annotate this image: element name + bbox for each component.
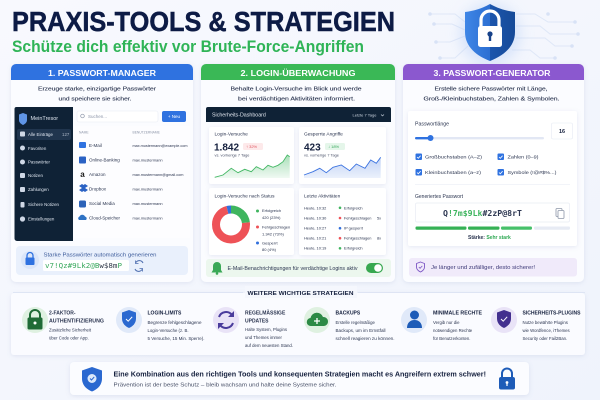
strategy: Backups: Erstelle regelmäßige [336,320,376,325]
password manager sidebar: MeinTresor [30,116,58,122]
dashboard header: Letzte 7 Tage [352,112,377,118]
icon: padlock [499,369,515,390]
auto-generate password callout: Starke Passwörter automatisch generieren [44,252,156,258]
panel: weitere wichtige Strategien [11,286,585,355]
panel heading 1 [11,64,193,80]
strategy: Regelmäßige Updates: und Themes immer [245,335,283,340]
auto-generate password callout: v7!Qz#9Lk2@B w$8mP [45,262,122,270]
panel 2 description: Behalte Login-Versuche im Blick und werde [230,86,362,92]
character option checkboxes: Großbuchstaben (A–Z) [425,155,482,161]
strategy: Login-Limits [116,307,204,341]
password length slider: 16 [559,129,565,135]
recent activity card: Fehlgeschlagen [344,236,371,240]
recent activity card: Heute, 10:30 [304,215,327,220]
section heading: WEITERE WICHTIGE STRATEGIEN [248,291,354,297]
panel: Passwort-Generator [403,64,584,282]
password entry table: max.mustermann [132,186,163,192]
panel 3 description [424,86,560,102]
recent activity card [299,188,386,255]
strategy: 2-Faktor: über Code oder App. [49,336,89,340]
panel 1 description [38,86,156,102]
password strength meter: Stärke: Sehr stark [468,235,511,241]
panel 3 description: Erstelle sichere Passwörter mit Länge, [434,86,548,92]
panel 3 description: Groß-/Kleinbuchstaben, Zahlen & Symbolen. [424,96,560,102]
recent activity card: 8x [377,236,381,240]
strategy: 2-Faktor: Zusätzliche Sicherheit [49,328,92,332]
strategy: Minimale Rechte: MINIMALE RECHTE [433,310,483,316]
donut chart card: 80 (4%) [262,247,277,252]
recent activity card: Heute, 10:32 [304,205,326,210]
strategy: Regelmäßige Updates: Halte System, Plugins [245,327,287,332]
password manager sidebar [14,107,73,241]
strategy: 2-Faktor [22,307,104,340]
email notification bar [206,259,391,277]
password manager sidebar: Favoriten [28,146,47,151]
donut chart card: Gesperrt [262,240,278,246]
password entry table: max.mustermann [132,216,163,220]
panel 2 description [230,86,362,102]
password strength meter [416,226,570,241]
card: Login-Versuche: vs. vorherige 7 Tage [214,152,249,158]
strategy: Regelmäßige Updates [213,307,293,348]
strategy: Sicherheits-Plugins: Nutze bewährte Plugins [522,320,568,325]
search field and new button [77,111,186,122]
strategy: Regelmäßige Updates: REGELMÄSSIGE [245,310,286,316]
strategy: Minimale Rechte: für Benutzerkonten. [433,336,471,341]
panel 1 description: und speichere sie sicher. [58,96,132,102]
strategy: Minimale Rechte [401,307,483,341]
card: Gesperrte Angriffe: Gesperrte Angriffe [304,132,343,138]
password entry table: max.mustermann [132,201,163,206]
subtitle: Schütze dich effektiv vor Brute-Force-Angriffen [12,38,364,56]
character option checkboxes: Symbole (!@#$%...) [508,170,557,176]
strategy: Regelmäßige Updates: auf dem neuesten Stand. [245,343,293,348]
recent activity card: 5x [377,215,381,220]
strategy: Backups: Backups, um im Ernstfall [336,328,386,333]
recent activity card: Heute, 10:21 [304,236,326,240]
generated password field: Q!7m$9Lk #2zP@8rT [443,209,523,218]
character option checkboxes: Zahlen (0–9) [508,155,539,161]
password entry table: NAME [79,130,89,134]
character option checkboxes [416,154,557,176]
strategy: Sicherheits-Plugins [491,307,581,341]
panel: Login-Überwachung [201,64,395,282]
card: Gesperrte Angriffe [299,127,386,184]
character option checkboxes: Kleinbuchstaben (a–z) [425,170,481,176]
password entry table: Online-Banking [89,158,120,162]
strategy: Sicherheits-Plugins: SICHERHEITS-PLUGINS [522,310,581,316]
generator settings card [408,111,577,246]
donut chart card: Fehlgeschlagen [262,224,290,229]
strategy: Backups: schnell reagieren zu können. [336,336,394,341]
donut chart card: 1.342 (73%) [262,232,284,236]
panel heading 3 [403,64,584,80]
panel: Passwort-Manager [11,64,193,282]
password entry table: Cloud-Speicher [89,216,121,220]
password entry table: Amazon [89,172,106,177]
email notification bar: E-Mail-Benachrichtigungen für verdächtige Logins aktiv [228,266,358,272]
panel heading 1: 1. PASSWORT-MANAGER [48,68,157,78]
card: Gesperrte Angriffe: 423 [304,142,321,154]
strategy: Login-Limits: Login-Versuche (z. B. [148,328,189,333]
tip callout: Je länger und zufälliger, desto sicherer! [431,265,535,271]
donut chart card [209,188,294,255]
strategy: Backups [304,307,394,341]
password manager sidebar: Einstellungen [28,216,55,222]
icon: shield with padlock and circuit lines [428,4,580,64]
panel 1 description: Erzeuge starke, einzigartige Passwörter [38,86,156,92]
strategy: Regelmäßige Updates: UPDATES [245,318,269,324]
password entry table: E-Mail [89,143,102,148]
password length slider [415,122,572,141]
strategy: Sicherheits-Plugins: wie Wordfence, iThemes [522,328,570,333]
bottom banner [70,362,529,395]
password entry table: BENUTZERNAME [132,130,161,134]
card: Login-Versuche: ↑ 32% [246,144,258,149]
card: Login-Versuche: Login-Versuche [214,132,248,138]
strategy: Login-Limits: 5 Versuche, 15 Min. Sperre). [148,336,204,341]
donut chart card: Login-Versuche nach Status [214,194,275,200]
recent activity card: Fehlgeschlagen [344,215,371,220]
strategy: Minimale Rechte: notwendigen Rechte [433,328,473,333]
dashboard header: Sicherheits-Dashboard [212,112,266,118]
recent activity card: Heute, 10:27 [304,226,326,230]
banner text: Prävention ist der beste Schutz – bleib wachsam und halte deine Systeme sicher. [114,382,336,388]
password manager sidebar: Notizen [28,173,43,178]
card: Gesperrte Angriffe: vs. vorherige 7 Tage [304,152,339,158]
password entry table: max.mustermann [132,158,163,162]
recent activity card: Heute, 10:19 [304,246,326,250]
dashboard header [206,107,391,122]
password entry table: a [80,170,85,179]
recent activity card: IP gesperrt [344,226,364,230]
recent activity card: Erfolgreich [344,205,363,210]
icon: shield [82,367,102,392]
generated password field [415,194,570,222]
donut chart card: 420 (23%) [262,215,281,220]
panel heading 2: 2. LOGIN-ÜBERWACHUNG [240,68,356,78]
donut chart card: Erfolgreich [262,208,281,213]
password manager sidebar: 127 [62,132,70,137]
password entry table: Social Media [89,201,115,206]
generated password field: Generiertes Passwort [415,194,464,200]
search field and new button: Suchen... [88,114,107,119]
password manager sidebar: Alle Einträge [28,132,53,137]
password manager sidebar: Zahlungen [28,187,49,192]
password manager sidebar: Passwörter [28,160,50,164]
recent activity card: Letzte Aktivitäten [304,194,341,200]
auto-generate password callout [16,246,188,275]
recent activity card: Erfolgreich [344,246,363,250]
strategy: Minimale Rechte: Vergib nur die [433,320,460,325]
strategy: Backups: BACKUPS [336,310,361,316]
strategy: Login-Limits: LOGIN-LIMITS [148,310,182,316]
password entry table [74,126,190,238]
password manager sidebar: Sichere Notizen [28,202,60,207]
banner text: Eine Kombination aus den richtigen Tools und konsequenten Strategien macht es Angreifern extrem schwer! [114,372,486,378]
card: Login-Versuche [209,127,294,184]
password entry table: max.mustermann@gmail.com [132,172,184,177]
panel heading 2 [201,64,395,80]
title: PRAXIS-TOOLS & STRATEGIEN [12,6,395,37]
strategy: 2-Faktor: AUTHENTIFIZIERUNG [49,318,104,324]
strategy: Login-Limits: Begrenze fehlgeschlagene [148,320,202,325]
card: Login-Versuche: 1.842 [214,142,239,154]
tip callout [409,258,577,276]
password length slider: Passwortlänge [415,122,449,128]
password entry table: max.mustermann@example.com [132,143,188,148]
strategy: Sicherheits-Plugins: Security oder Fail2Ban. [522,336,567,341]
panel 2 description: bei verdächtigen Aktivitäten informiert. [238,96,355,102]
panel heading 3: 3. PASSWORT-GENERATOR [434,68,551,78]
strategy: 2-Faktor: 2-FAKTOR- [49,310,76,316]
banner text [114,372,486,388]
search field and new button: + Neu [168,114,181,119]
password entry table: Dropbox [89,186,107,192]
card: Gesperrte Angriffe: ↓ 18% [328,144,340,149]
